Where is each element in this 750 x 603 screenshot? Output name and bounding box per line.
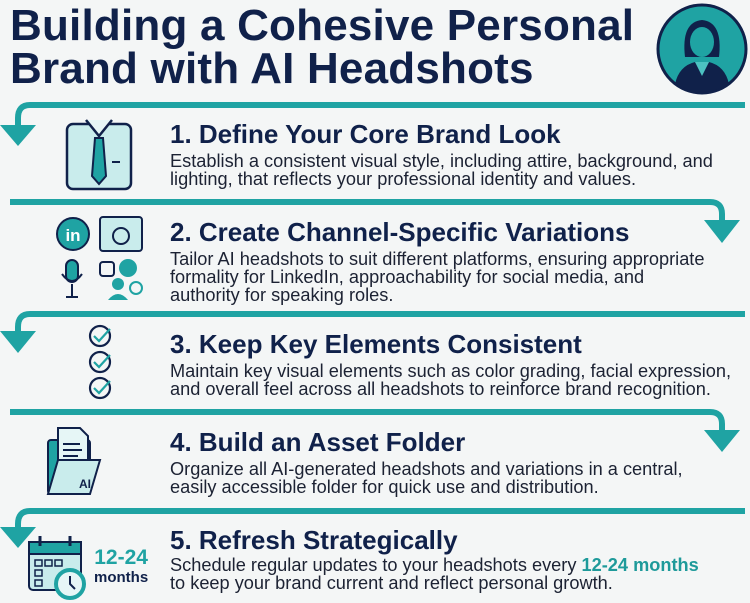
step 1: 1. Define Your Core Brand Look (170, 119, 561, 149)
title (10, 1, 634, 93)
text: easily accessible folder for quick use and distribution. (170, 477, 599, 497)
icon: calendar clock (28, 536, 86, 600)
step 5: 5. Refresh Strategically (170, 525, 458, 555)
text: Tailor AI headshots to suit different platforms, ensuring appropriate (170, 249, 704, 269)
title: Building a Cohesive Personal (10, 1, 634, 50)
step 2: 2. Create Channel-Specific Variations (170, 217, 630, 247)
text: formality for LinkedIn, approachability for social media, and (170, 267, 644, 287)
icon: channels (56, 216, 143, 300)
label: 12-24 months: months (94, 569, 148, 586)
text: Maintain key visual elements such as color grading, facial expression, (170, 361, 731, 381)
icon: channels: in (65, 226, 81, 245)
text: and overall feel across all headshots to reinforce brand recognition. (170, 379, 711, 399)
title: Brand with AI Headshots (10, 44, 534, 93)
step 3: 3. Keep Key Elements Consistent (170, 329, 582, 359)
icon: AI folder (46, 427, 102, 495)
icon: checklist (88, 324, 112, 400)
label: 12-24 months (94, 546, 148, 586)
text: Schedule regular updates to your headshots every 12-24 months (170, 555, 699, 575)
text: Organize all AI-generated headshots and variations in a central, (170, 459, 683, 479)
text: lighting, that reflects your professional identity and values. (170, 169, 636, 189)
icon: shirt (66, 119, 132, 190)
text: Establish a consistent visual style, including attire, background, and (170, 151, 713, 171)
step 4: 4. Build an Asset Folder (170, 427, 465, 457)
text: to keep your brand current and reflect personal growth. (170, 573, 613, 593)
icon: avatar (656, 4, 748, 94)
icon: AI folder: AI (79, 477, 91, 491)
text: authority for speaking roles. (170, 285, 393, 305)
label: 12-24 months: 12-24 (94, 546, 148, 569)
